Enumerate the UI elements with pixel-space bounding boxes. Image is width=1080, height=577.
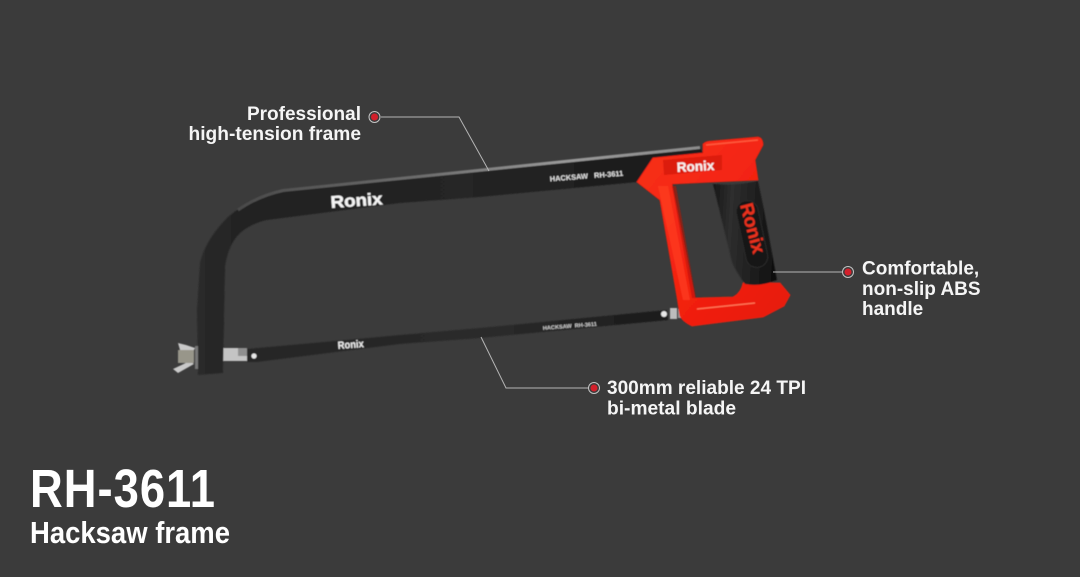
frame logo: Ronix (330, 189, 384, 212)
title: model number: RH-3611 (30, 459, 216, 519)
callout: blade (481, 337, 806, 420)
callout: blade: 300mm reliable 24 TPI (607, 378, 806, 399)
handle logo: Ronix (676, 158, 715, 175)
callout: high-tension frame (188, 104, 489, 171)
hacksaw illustration (173, 137, 790, 375)
handle logo (663, 155, 722, 175)
blade model text: HACKSAW RH-3611 (543, 322, 597, 332)
grip logo: Ronix (736, 201, 770, 256)
red handle body (637, 137, 790, 326)
callout: high-tension frame: high-tension frame (188, 124, 361, 145)
callout: ABS handle: Comfortable, (862, 258, 979, 280)
frame model text: HACKSAW RH-3611 (549, 169, 623, 183)
callout: blade: bi-metal blade (607, 398, 736, 420)
blade logo: Ronix (337, 338, 364, 352)
black grip (713, 181, 777, 285)
hacksaw blade (223, 308, 683, 362)
steel frame (197, 147, 703, 375)
callout: high-tension frame: Professional (247, 104, 361, 125)
subtitle: product name: Hacksaw frame (30, 516, 230, 550)
callout: ABS handle: non-slip ABS (862, 279, 981, 300)
wing nut (173, 343, 198, 373)
callout: ABS handle (773, 258, 981, 320)
callout: ABS handle: handle (862, 299, 923, 320)
